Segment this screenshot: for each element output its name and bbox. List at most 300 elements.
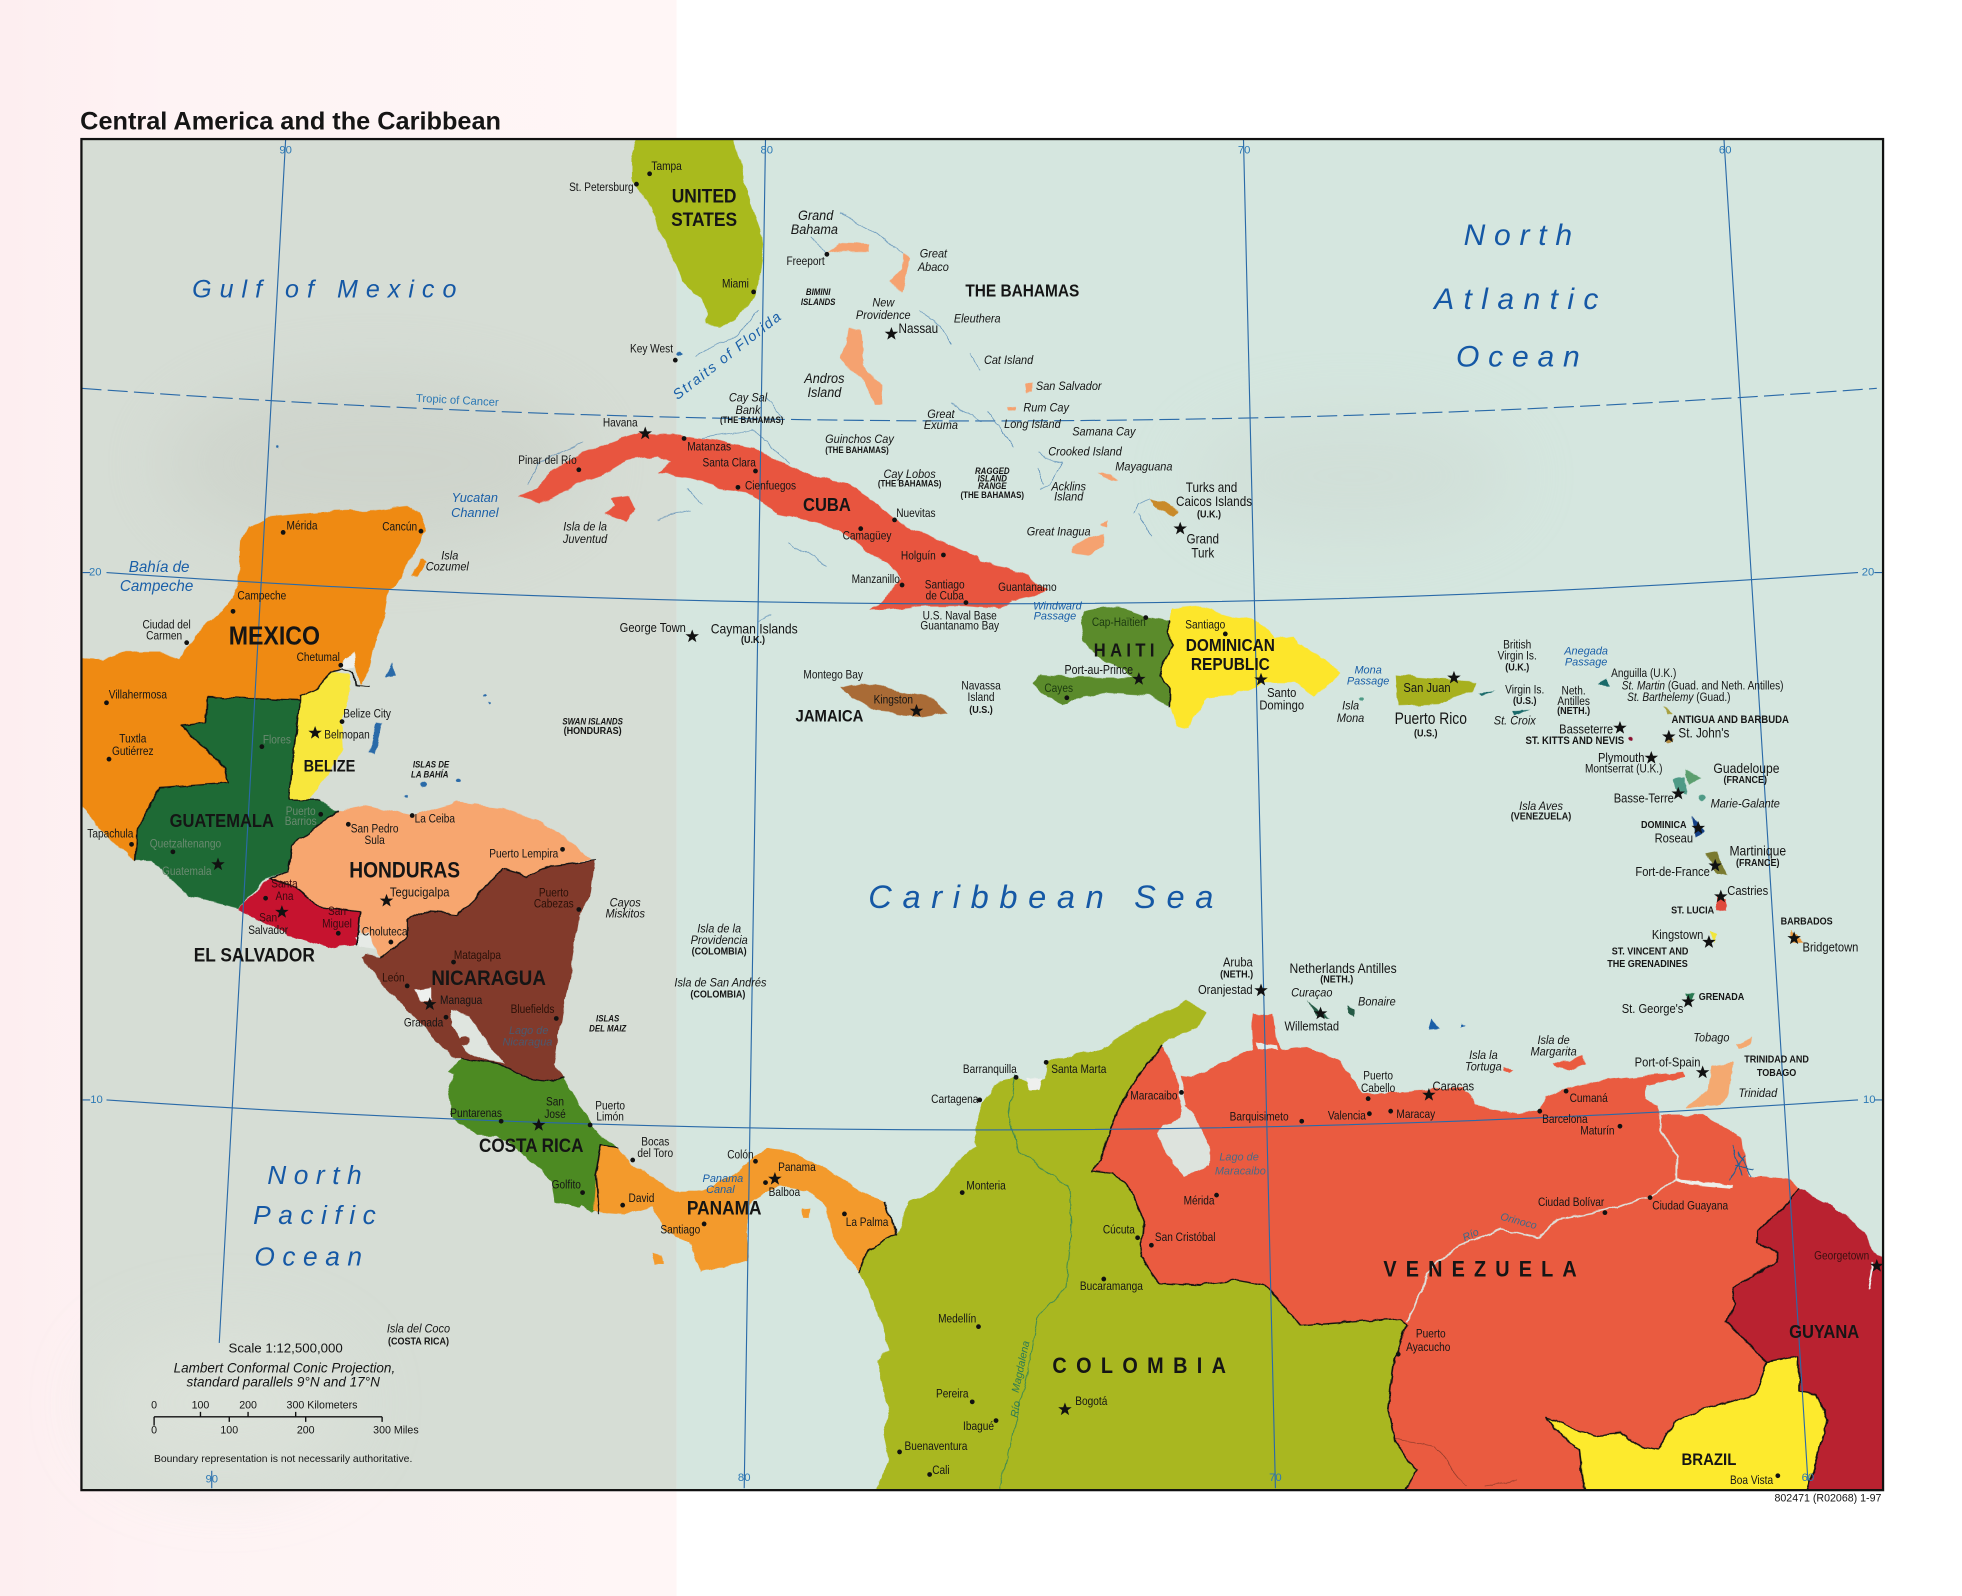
country: Honduras: [269, 802, 592, 957]
South America labels: Maracay: [1396, 1108, 1436, 1121]
land: mainland (zoom-space coordinates, bottom): [238, 802, 1892, 1499]
water feature labels: Passage: [1565, 657, 1607, 669]
water feature labels: Canal: [706, 1184, 735, 1196]
South America labels: Barcelona: [1542, 1113, 1588, 1126]
scale and projection note: standard parallels 9°N and 17°N: [186, 1374, 380, 1389]
Florida, Bahamas and Cuba labels: Cienfuegos: [745, 480, 797, 493]
Central America labels: Salvador: [248, 924, 288, 937]
country names: HAITI: [1094, 640, 1159, 661]
Central America labels: David: [629, 1192, 654, 1205]
Lesser Antilles labels: THE GRENADINES: [1607, 959, 1688, 970]
reference code: 802471 (R02068) 1-97: [1774, 1492, 1881, 1504]
Florida, Bahamas and Cuba labels: Holguín: [901, 550, 936, 563]
water feature labels: Anegada: [1563, 645, 1608, 658]
country names: BRAZIL: [1681, 1450, 1737, 1469]
international borders: [269, 810, 1828, 1499]
Lesser Antilles labels: Neth.: [1562, 685, 1586, 698]
Florida, Bahamas and Cuba labels: BIMINI: [806, 287, 831, 297]
water feature labels: Lago de: [509, 1025, 548, 1037]
Central America labels: Gutiérrez: [112, 745, 154, 758]
South America labels: Medellín: [938, 1313, 976, 1326]
ocean labels: Ocean: [1456, 341, 1588, 374]
Central America labels: LA BAHÍA: [411, 769, 448, 779]
Florida, Bahamas and Cuba labels: Manzanillo: [852, 574, 900, 586]
Florida, Bahamas and Cuba labels: Eleuthera: [954, 313, 1001, 326]
Florida, Bahamas and Cuba labels: Island: [808, 384, 842, 400]
country names: GUATEMALA: [170, 810, 274, 831]
Florida, Bahamas and Cuba labels: Cay Sal: [729, 392, 768, 405]
South America labels: Georgetown: [1814, 1250, 1869, 1263]
South America labels: Caracas: [1433, 1079, 1474, 1094]
Florida, Bahamas and Cuba labels: (THE BAHAMAS): [961, 490, 1024, 500]
country names: UNITED: [672, 184, 737, 207]
country names: GUYANA: [1789, 1321, 1859, 1342]
Greater Antilles labels: (U.S.): [969, 705, 993, 716]
Florida, Bahamas and Cuba labels: Grand: [1187, 531, 1219, 547]
Central America labels: Campeche: [237, 590, 286, 603]
water feature labels: Windward: [1033, 600, 1082, 612]
ocean labels: Pacific: [253, 1200, 383, 1230]
Lesser Antilles labels: (FRANCE): [1736, 857, 1780, 869]
Lesser Antilles labels: (NETH.): [1557, 706, 1590, 717]
country names: MEXICO: [229, 622, 320, 651]
South America labels: (NETH.): [1320, 974, 1353, 985]
Central America labels: (COSTA RICA): [388, 1336, 449, 1347]
South America labels: Aruba: [1223, 955, 1253, 970]
Central America labels: Cancún: [382, 521, 417, 534]
country names: BELIZE: [304, 758, 355, 776]
South America labels: Ciudad Bolívar: [1538, 1196, 1605, 1209]
water feature labels: Channel: [451, 505, 500, 520]
ocean labels: Ocean: [254, 1242, 370, 1272]
Central America labels: del Toro: [637, 1147, 673, 1160]
Lesser Antilles labels: British: [1503, 639, 1531, 652]
country names: COSTA RICA: [479, 1134, 583, 1156]
Central America labels: Puntarenas: [450, 1107, 502, 1120]
Greater Antilles labels: Island: [968, 691, 994, 704]
Florida, Bahamas and Cuba labels: Bahama: [791, 221, 838, 237]
Golfete de Coro: [1257, 1041, 1278, 1050]
water feature labels: Nicaragua: [503, 1036, 552, 1048]
graticule labels: 10: [1863, 1094, 1876, 1106]
Central America labels: Flores: [263, 734, 291, 747]
water feature labels: Río: [1461, 1226, 1481, 1244]
Greater Antilles labels: Domingo: [1259, 698, 1304, 713]
Central America labels: San Pedro: [351, 823, 398, 836]
Lesser Antilles labels: Anguilla (U.K.): [1611, 668, 1676, 680]
Florida, Bahamas and Cuba labels: Providence: [856, 309, 911, 322]
South America labels: Curaçao: [1291, 987, 1332, 1000]
graticule labels: 10: [90, 1094, 103, 1106]
South America labels: Pereira: [936, 1388, 969, 1401]
water feature labels: Passage: [1347, 675, 1389, 688]
scale and projection note: 300 Kilometers: [287, 1400, 357, 1412]
Central America labels: Puerto: [286, 805, 316, 818]
water feature labels: Straits of Florida: [670, 308, 786, 403]
South America labels: Ciudad Guayana: [1652, 1200, 1729, 1213]
scale and projection note: Scale 1:12,500,000: [228, 1340, 343, 1355]
South America labels: Monteria: [966, 1180, 1007, 1193]
Haiti / Dominican Republic border: [1160, 621, 1172, 706]
scale and projection note: [151, 1340, 419, 1465]
map frame: [81, 139, 1883, 1490]
Lesser Antilles labels: St. John's: [1678, 725, 1729, 741]
Central America labels: Ana: [275, 891, 294, 903]
Florida, Bahamas and Cuba labels: San Salvador: [1036, 381, 1103, 393]
Lesser Antilles labels: TRINIDAD AND: [1744, 1054, 1809, 1066]
Central America labels: Matagalpa: [454, 949, 502, 962]
Central America labels: Carmen: [146, 630, 182, 643]
Lesser Antilles labels: Isla Aves: [1519, 801, 1563, 813]
country: Panama: [592, 1145, 896, 1273]
South America labels: Willemstad: [1284, 1018, 1339, 1034]
river: Orinoco mouth: [1676, 1181, 1733, 1186]
water feature labels: Mona: [1354, 664, 1382, 676]
country: Venezuela: [1091, 1012, 1798, 1499]
Florida, Bahamas and Cuba labels: (U.K.): [1197, 509, 1221, 521]
water feature labels: Campeche: [120, 578, 193, 595]
Lesser Antilles labels: St. Croix: [1494, 715, 1537, 728]
Lesser Antilles labels: Montserrat (U.K.): [1585, 763, 1662, 776]
Florida, Bahamas and Cuba labels: RANGE: [978, 481, 1007, 491]
Lesser Antilles labels: ST. KITTS AND NEVIS: [1526, 736, 1624, 747]
South America labels: Barranquilla: [963, 1063, 1018, 1076]
Florida, Bahamas and Cuba labels: Turks and: [1186, 479, 1237, 495]
Florida, Bahamas and Cuba labels: Guantanamo: [998, 581, 1057, 594]
Central America labels: Puerto: [539, 887, 569, 900]
river delta: [1729, 1145, 1754, 1179]
Central America labels: (HONDURAS): [564, 726, 622, 737]
country names: PANAMA: [687, 1197, 761, 1219]
Florida, Bahamas and Cuba labels: Freeport: [786, 255, 825, 268]
Ciénaga bay: [1027, 1077, 1043, 1090]
graticule labels: 90: [279, 144, 292, 156]
Central America labels: Miskitos: [605, 908, 645, 921]
country: Guyana: [1726, 1189, 1892, 1499]
graticule labels: 60: [1719, 144, 1731, 156]
Lesser Antilles labels: ST. LUCIA: [1671, 905, 1714, 917]
island: Margarita: [1503, 1054, 1586, 1072]
Central America labels: Isla de San Andrés: [674, 977, 767, 990]
Florida, Bahamas and Cuba labels: Grand: [798, 208, 834, 223]
country: Brazil: [1548, 1356, 1828, 1499]
banks: [987, 412, 1153, 537]
country names: VENEZUELA: [1383, 1256, 1586, 1282]
graticule labels: 70: [1238, 144, 1250, 156]
South America labels: San Cristóbal: [1155, 1231, 1216, 1244]
Florida, Bahamas and Cuba labels: New: [872, 297, 895, 309]
capital stars: [211, 327, 1884, 1415]
Central America labels: Miguel: [322, 918, 352, 931]
Greater Antilles labels: Cayes: [1044, 683, 1073, 695]
South America labels: Puerto: [1363, 1070, 1393, 1083]
Florida, Bahamas and Cuba labels: Island: [1054, 491, 1084, 504]
Florida, Bahamas and Cuba labels: Havana: [603, 417, 638, 430]
Florida, Bahamas and Cuba labels: Guinchos Cay: [825, 433, 895, 446]
Central America labels: Limón: [596, 1111, 624, 1124]
Greater Antilles labels: [620, 616, 1467, 740]
scale and projection note: 100: [192, 1400, 209, 1412]
Greater Antilles labels: Isla: [1342, 700, 1359, 713]
Florida, Bahamas and Cuba labels: Cat Island: [984, 355, 1034, 367]
scale and projection note: 0: [151, 1425, 157, 1437]
Florida, Bahamas and Cuba labels: Key West: [630, 343, 673, 356]
Central America labels: Chetumal: [297, 651, 340, 664]
graticule labels: 20: [1862, 567, 1874, 579]
Central America labels: Santiago: [660, 1224, 700, 1237]
scale and projection note: 100: [220, 1425, 238, 1437]
water feature labels: Yucatan: [452, 490, 498, 505]
Florida, Bahamas and Cuba labels: Abaco: [917, 262, 949, 274]
Florida, Bahamas and Cuba labels: Nuevitas: [896, 507, 936, 520]
Florida, Bahamas and Cuba labels: Acklins: [1050, 481, 1086, 494]
water feature labels: Orinoco: [1499, 1211, 1538, 1232]
Central America labels: La Ceiba: [415, 813, 456, 826]
South America labels: Maturín: [1580, 1125, 1615, 1138]
Florida, Bahamas and Cuba labels: Juventud: [562, 534, 608, 546]
Florida, Bahamas and Cuba labels: St. Petersburg: [569, 181, 634, 194]
Lesser Antilles labels: BARBADOS: [1781, 916, 1833, 928]
island: Coiba: [651, 1208, 809, 1265]
Greater Antilles labels: (U.S.): [1414, 728, 1438, 740]
ocean labels: Caribbean Sea: [868, 879, 1224, 915]
Florida, Bahamas and Cuba labels: (THE BAHAMAS): [825, 444, 889, 455]
territory: Puerto Rico: [1396, 675, 1476, 706]
Florida, Bahamas and Cuba labels: Nassau: [899, 320, 938, 336]
country: Nicaragua: [360, 861, 595, 1082]
Lesser Antilles labels: Antilles: [1557, 695, 1590, 708]
Central America labels: Belmopan: [324, 729, 370, 742]
river: Magdalena: [997, 1074, 1072, 1499]
water feature labels: Maracaibo: [1215, 1165, 1266, 1177]
Central America labels: Puerto: [595, 1100, 625, 1113]
Central America labels: Bluefields: [511, 1003, 555, 1016]
South America labels: Cumaná: [1570, 1092, 1609, 1105]
islands: Lesser Antilles south: [1428, 851, 1803, 1030]
land: eastern islands (zoom-space coordinates, top right): [987, 381, 1705, 837]
scale and projection note: Lambert Conformal Conic Projection,: [174, 1361, 395, 1375]
South America labels: Puerto: [1416, 1328, 1446, 1341]
land masses: [69, 131, 1892, 1499]
Florida, Bahamas and Cuba labels: Guantanamo Bay: [920, 620, 999, 633]
South America labels: Cúcuta: [1103, 1224, 1136, 1237]
Florida, Bahamas and Cuba labels: Turk: [1191, 544, 1215, 561]
scale and projection note: 200: [239, 1400, 257, 1412]
ocean labels: North: [267, 1160, 369, 1190]
Central America labels: Quetzaltenango: [150, 838, 221, 851]
Central America labels: Sula: [365, 834, 386, 847]
graticule labels: 80: [738, 1472, 750, 1484]
South America labels: Valencia: [1328, 1110, 1367, 1123]
Florida, Bahamas and Cuba labels: Isla de la: [563, 521, 607, 534]
islands: small cays: [278, 351, 682, 798]
Lesser Antilles labels: Margarita: [1530, 1046, 1577, 1059]
Greater Antilles labels: San Juan: [1403, 680, 1451, 695]
South America labels: Cartagena: [931, 1093, 979, 1106]
Central America labels: Isla del Coco: [387, 1323, 450, 1335]
Central America labels: Barrios: [285, 815, 317, 828]
title: Central America and the Caribbean: [80, 108, 501, 136]
Central America labels: Balboa: [769, 1186, 801, 1199]
Florida, Bahamas and Cuba labels: ISLAND: [978, 473, 1007, 484]
Central America labels: La Palma: [846, 1216, 889, 1229]
South America labels: Bonaire: [1358, 996, 1396, 1008]
graticule labels: 80: [760, 144, 773, 156]
Lesser Antilles labels: Castries: [1727, 883, 1768, 898]
Lesser Antilles labels: (VENEZUELA): [1511, 811, 1571, 823]
strait of Maracaibo: [1178, 1074, 1184, 1105]
Florida, Bahamas and Cuba labels: Matanzas: [687, 441, 732, 454]
Central America labels: Bocas: [641, 1136, 670, 1149]
South America labels: Buenaventura: [905, 1440, 968, 1453]
ocean labels: Atlantic: [1432, 283, 1608, 316]
country names: STATES: [671, 208, 737, 230]
islands: Bahamas and Turks and Caicos: [1007, 381, 1178, 555]
Florida, Bahamas and Cuba labels: ISLANDS: [801, 297, 836, 307]
Florida, Bahamas and Cuba labels: (THE BAHAMAS): [878, 478, 942, 489]
Central America labels: José: [544, 1108, 566, 1121]
country: Haiti: [1032, 606, 1172, 706]
Central America labels: León: [382, 972, 405, 985]
Central America labels: Panama: [778, 1161, 817, 1174]
scale and projection note: 200: [297, 1425, 315, 1437]
Greater Antilles labels: Kingston: [874, 694, 913, 707]
scale and projection note: 0: [151, 1400, 157, 1412]
Florida, Bahamas and Cuba labels: Caicos Islands: [1176, 493, 1252, 509]
water feature labels: Bahía de: [129, 559, 189, 576]
country names: HONDURAS: [349, 858, 460, 883]
Florida, Bahamas and Cuba labels: U.S. Naval Base: [923, 610, 997, 623]
island: Cozumel: [410, 560, 426, 576]
Greater Antilles labels: Mona: [1337, 713, 1364, 725]
Lesser Antilles labels: (U.S.): [1513, 696, 1537, 707]
Central America labels: Providencia: [691, 935, 748, 947]
Florida, Bahamas and Cuba labels: Tampa: [651, 160, 683, 173]
lake island: [459, 1036, 470, 1045]
scale and projection note: Boundary representation is not necessarily authoritative.: [154, 1454, 412, 1465]
South America labels: Cabello: [1361, 1082, 1395, 1095]
Lesser Antilles labels: Martinique: [1729, 843, 1786, 859]
Florida, Bahamas and Cuba labels: RAGGED: [975, 466, 1010, 476]
Lesser Antilles labels: Virgin Is.: [1498, 650, 1537, 663]
Central America labels: Cabezas: [534, 898, 574, 911]
country: Dominican Republic: [1160, 606, 1339, 729]
graticule labels: 20: [89, 567, 101, 579]
Central America labels: (COLOMBIA): [690, 989, 745, 1000]
Central America labels: Belize City: [343, 708, 391, 721]
graticule labels: [89, 144, 1876, 1485]
graticule labels: 90: [205, 1473, 218, 1485]
city dots: [104, 171, 1780, 1478]
Florida, Bahamas and Cuba labels: Andros: [803, 371, 845, 386]
Florida, Bahamas and Cuba labels: Great: [927, 408, 955, 421]
Lesser Antilles labels: Isla la: [1469, 1050, 1498, 1062]
Central America labels: Cayos: [610, 897, 641, 909]
country names: EL SALVADOR: [194, 943, 315, 966]
Central America labels: Isla de la: [697, 923, 741, 936]
Lesser Antilles labels: Trinidad: [1738, 1087, 1778, 1100]
graticule labels: 60: [1802, 1472, 1814, 1484]
Central America labels: (COLOMBIA): [692, 946, 747, 958]
Central America labels: Tuxtla: [119, 733, 147, 746]
islands: Lesser Antilles: [1359, 680, 1705, 837]
scale and projection note: 300 Miles: [373, 1425, 419, 1437]
South America labels: Mérida: [1184, 1195, 1215, 1208]
country: Mexico: [69, 506, 426, 861]
South America labels: (NETH.): [1220, 969, 1253, 980]
Lesser Antilles labels: Roseau: [1655, 831, 1693, 846]
Lesser Antilles labels: ST. VINCENT AND: [1612, 946, 1689, 958]
Florida, Bahamas and Cuba labels: Santiago: [925, 579, 965, 591]
Lesser Antilles labels: (FRANCE): [1723, 775, 1767, 786]
Central America labels: DEL MAIZ: [589, 1023, 627, 1034]
lake: Managua: [413, 988, 432, 1001]
Lesser Antilles labels: St. George's: [1622, 1001, 1683, 1016]
river: Orinoco: [1407, 1115, 1676, 1321]
ocean labels: Gulf of Mexico: [192, 275, 464, 303]
Greater Antilles labels: George Town: [620, 620, 686, 635]
Central America labels: Granada: [404, 1017, 444, 1030]
Florida, Bahamas and Cuba labels: Camagüey: [843, 530, 892, 543]
country names: THE BAHAMAS: [965, 281, 1079, 301]
Central America labels: San: [546, 1096, 564, 1109]
sea background: [81, 139, 1883, 1490]
water feature labels: [120, 308, 1608, 1419]
water feature labels: Tropic of Cancer: [416, 393, 499, 409]
ocean labels: North: [1464, 219, 1581, 252]
South America labels: Barquisimeto: [1230, 1111, 1289, 1124]
Lesser Antilles labels: [1465, 639, 1858, 1100]
country: Guatemala: [135, 697, 338, 909]
Greater Antilles labels: Cap-Haïtien: [1092, 616, 1146, 629]
Greater Antilles labels: Navassa: [961, 680, 1002, 693]
Lesser Antilles labels: Bridgetown: [1803, 940, 1858, 955]
Greater Antilles labels: Santo: [1267, 685, 1296, 700]
Greater Antilles labels: (U.K.): [741, 634, 765, 646]
Greater Antilles labels: Santiago: [1185, 619, 1225, 632]
islands: Bahamas: [827, 243, 910, 404]
land: western half (zoom-space coordinates, top): [69, 131, 1047, 909]
water feature labels: Magdalena: [1010, 1340, 1032, 1394]
South America labels: Cali: [932, 1464, 950, 1477]
Florida, Bahamas and Cuba labels: [426, 160, 1252, 633]
Central America labels: Santa: [271, 878, 298, 891]
country names: NICARAGUA: [431, 967, 546, 990]
water feature labels: Lago de: [1219, 1151, 1259, 1164]
Lesser Antilles labels: Tobago: [1693, 1032, 1729, 1045]
Florida, Bahamas and Cuba labels: Crooked Island: [1048, 446, 1122, 458]
Florida, Bahamas and Cuba labels: Mayaguana: [1115, 461, 1172, 474]
Florida, Bahamas and Cuba labels: Isla: [441, 550, 458, 562]
Florida, Bahamas and Cuba labels: Miami: [722, 278, 749, 291]
Central America labels: Mérida: [287, 520, 318, 533]
South America labels: Boa Vista: [1730, 1474, 1774, 1487]
country: Cuba: [517, 432, 1047, 611]
lake: Maracaibo: [1156, 1100, 1210, 1177]
Lesser Antilles labels: Basse-Terre: [1614, 790, 1674, 806]
Florida, Bahamas and Cuba labels: Exuma: [924, 420, 958, 432]
Georgetown estuary: [1868, 1262, 1873, 1288]
Lesser Antilles labels: TOBAGO: [1757, 1068, 1796, 1079]
country names: [170, 184, 1859, 1469]
Greater Antilles labels: Montego Bay: [803, 669, 863, 682]
island: Isla de la Juventud: [605, 496, 636, 522]
country: Costa Rica: [448, 1059, 617, 1214]
graticule: [81, 139, 1883, 1488]
reefs and banks: [526, 213, 981, 621]
Florida, Bahamas and Cuba labels: Long Island: [1004, 418, 1061, 431]
South America labels: Ayacucho: [1406, 1341, 1450, 1354]
